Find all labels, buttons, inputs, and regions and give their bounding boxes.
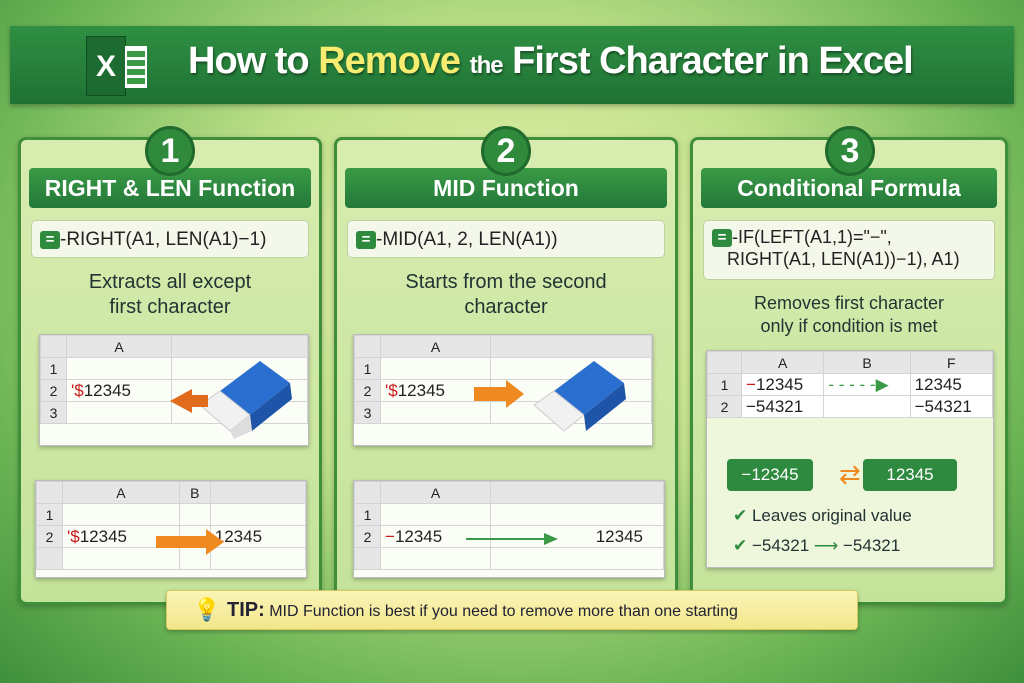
- results box: −12345: [746, 374, 803, 394]
- sheet 1: '$12345: [385, 380, 445, 400]
- formula: [703, 220, 995, 280]
- sheet 2: '$12345: [67, 526, 127, 546]
- formula: -IF(LEFT(A1,1)="−",: [732, 227, 892, 247]
- panel: 3 conditional: [690, 137, 1008, 605]
- results box: 12345: [915, 374, 962, 394]
- sheet 1: A: [114, 338, 124, 354]
- arrow green: [466, 533, 558, 545]
- results box: [706, 350, 994, 568]
- green value buttons: −12345: [741, 465, 799, 484]
- heading: MID Function: [433, 175, 579, 201]
- sheet 1: A: [431, 338, 440, 354]
- sheet 2: 12345: [596, 526, 643, 546]
- sheet 2: −12345: [385, 526, 442, 546]
- sheet 2: [353, 480, 665, 578]
- sheet 1: [353, 334, 653, 446]
- heading: [701, 168, 997, 208]
- number 3: 3: [841, 132, 859, 170]
- sheet 1: 1: [50, 360, 57, 376]
- description: Removes first character: [754, 293, 944, 313]
- panel: 1 right & len: [18, 137, 322, 605]
- number 1: [145, 126, 195, 176]
- description: character: [464, 296, 548, 318]
- results box: 2: [721, 398, 728, 414]
- icon: excel: [86, 36, 147, 96]
- formula: =: [46, 231, 54, 248]
- description: only if condition is met: [760, 316, 938, 336]
- sheet 2: 2: [364, 528, 371, 544]
- sheet 1: 3: [364, 404, 371, 420]
- description: [405, 271, 607, 318]
- results box: −54321: [915, 396, 972, 416]
- description: Starts from the second: [405, 271, 607, 293]
- description: [754, 293, 944, 336]
- green value buttons: [727, 459, 813, 491]
- number 2: [481, 126, 531, 176]
- sheet 1: '$12345: [71, 380, 131, 400]
- icon: bulb: 💡: [193, 597, 220, 622]
- heading: [29, 168, 311, 208]
- tip bar: [166, 590, 858, 630]
- sheet 2: B: [190, 484, 199, 500]
- formula: [31, 220, 309, 258]
- sheet 2: 1: [46, 506, 53, 522]
- number 1: 1: [161, 132, 179, 170]
- sheet 2: A: [431, 484, 440, 500]
- formula: =: [362, 231, 370, 248]
- sheet 1: [39, 334, 309, 446]
- sheet 2: 2: [46, 528, 53, 544]
- panel: 2 mid: [334, 137, 678, 605]
- results box: 1: [721, 376, 728, 392]
- checklist: ✔ Leaves original value: [733, 506, 912, 525]
- icon: eraser: [170, 361, 292, 439]
- formula: -MID(A1, 2, LEN(A1)): [376, 229, 558, 250]
- number 3: [825, 126, 875, 176]
- results box: 12345: [886, 465, 934, 484]
- formula: [347, 220, 665, 258]
- formula: -RIGHT(A1, LEN(A1)−1): [60, 229, 266, 250]
- sheet 2: 12345: [215, 526, 262, 546]
- title text: How to Remove the First Character in Excel: [188, 40, 913, 82]
- sheet 1: 3: [50, 404, 57, 420]
- results box: ⇄: [839, 459, 861, 489]
- results box: B: [862, 354, 872, 370]
- checklist: [733, 506, 912, 555]
- description: Extracts all except: [89, 271, 251, 293]
- heading: [345, 168, 667, 208]
- formula: =: [718, 229, 726, 246]
- description: first character: [109, 296, 231, 318]
- heading: RIGHT & LEN Function: [45, 175, 295, 201]
- sheet 2: [35, 480, 307, 578]
- sheet 1: 2: [364, 382, 371, 398]
- sheet 1: 2: [50, 382, 57, 398]
- checklist: ✔ −54321 ⟶ −54321: [733, 536, 900, 555]
- results box: F: [947, 354, 956, 370]
- heading: Conditional Formula: [737, 175, 961, 201]
- icon: excel: X: [96, 50, 116, 83]
- icon: eraser: [474, 361, 626, 432]
- sheet 1: 1: [364, 360, 371, 376]
- sheet 2: A: [116, 484, 126, 500]
- results box: - - - - -▶: [828, 374, 889, 394]
- sheet 2: 1: [364, 506, 371, 522]
- arrow orange: [156, 529, 224, 555]
- results box: A: [778, 354, 787, 370]
- number 2: 2: [497, 132, 515, 170]
- tip bar: TIP: MID Function is best if you need to remove more than one starting: [227, 599, 738, 621]
- description: [89, 271, 252, 318]
- title bar: [10, 26, 1014, 104]
- results box: −54321: [746, 396, 803, 416]
- formula: RIGHT(A1, LEN(A1))−1), A1): [727, 249, 960, 269]
